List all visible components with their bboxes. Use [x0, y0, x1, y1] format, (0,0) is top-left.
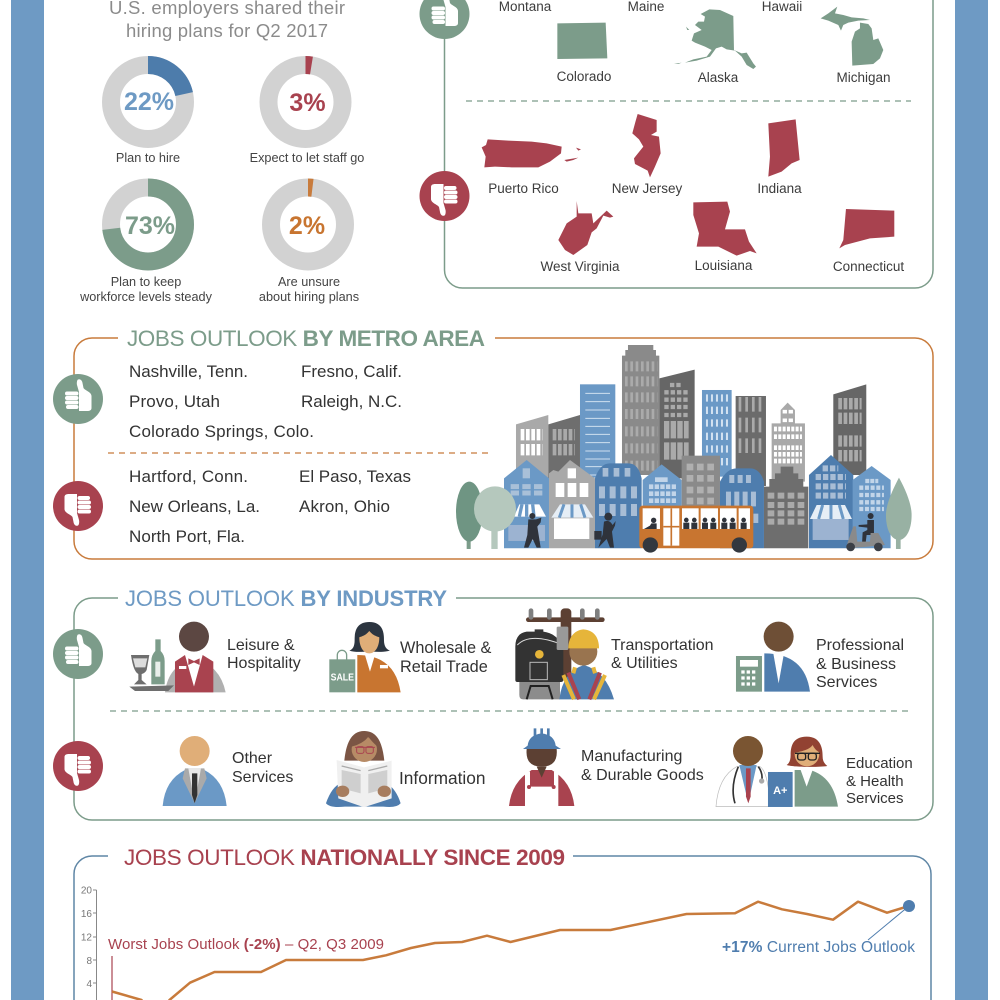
label: wholesale: Wholesale & — [400, 639, 492, 657]
icon: retail worker — [329, 622, 401, 692]
side band: left — [11, 0, 44, 1000]
icon: thumbs up industry — [53, 629, 103, 679]
state labels: negative: New Jersey — [612, 181, 683, 196]
icon: person reading newspaper — [326, 731, 401, 807]
state labels: negative: Puerto Rico — [488, 181, 559, 196]
icon: thumbs down states — [420, 171, 470, 221]
icon: other services person — [163, 736, 227, 806]
panel: jobs outlook by metro area — [53, 326, 933, 559]
panel border: metro — [74, 338, 933, 559]
chart line — [112, 902, 909, 1000]
label: information: Information — [399, 768, 485, 788]
metro list: positive: Raleigh, N.C. — [301, 392, 402, 411]
label: education: Services — [846, 790, 904, 807]
donut: 73% steady: Plan to keep — [111, 275, 181, 289]
donut: 3% let staff go — [250, 65, 364, 165]
chart axis: 4 — [86, 979, 92, 990]
donut: 3% let staff go: Expect to let staff go — [250, 151, 364, 165]
donut: 2% unsure: 2% — [289, 212, 325, 240]
chart axis: 12 — [81, 932, 92, 944]
panel border: industry — [74, 598, 933, 820]
icon: thumbs up metro — [53, 374, 103, 424]
donut: 73% steady: workforce levels steady — [79, 290, 213, 304]
icon: train and utility worker — [515, 608, 614, 699]
panel: jobs outlook by state — [420, 0, 933, 288]
label: professional: Services — [816, 674, 877, 691]
donut: 22% plan to hire: 22% — [124, 88, 174, 116]
icon: doctor and teacher: A+ — [773, 785, 787, 797]
icon: thumbs down metro — [53, 481, 103, 531]
divider: industry — [110, 710, 908, 712]
donut: 2% unsure: about hiring plans — [259, 290, 359, 304]
panel: employers hiring plans — [79, 0, 364, 304]
label: education: Education — [846, 755, 913, 772]
heading: national: JOBS OUTLOOK NATIONALLY SINCE 2009 — [124, 845, 565, 870]
donut: 2% unsure: Are unsure — [278, 275, 340, 289]
state shapes: negative — [482, 114, 894, 256]
chart axis: 8 — [86, 956, 92, 967]
heading: metro: JOBS OUTLOOK BY METRO AREA — [127, 326, 485, 351]
label: leisure: Leisure & — [227, 637, 295, 654]
state labels: negative: West Virginia — [540, 259, 620, 274]
donut: 3% let staff go: 3% — [289, 89, 326, 117]
label: wholesale: Retail Trade — [400, 658, 488, 676]
state labels: positive: Alaska — [698, 70, 739, 85]
metro list: negative: North Port, Fla. — [129, 527, 245, 546]
label: manufacturing: & Durable Goods — [581, 767, 704, 784]
metro list: negative: New Orleans, La. — [129, 497, 260, 516]
panel border: national — [74, 856, 931, 1000]
label: education: & Health — [846, 773, 904, 790]
state labels: negative: Connecticut — [833, 259, 904, 274]
annotation: current outlook — [722, 900, 915, 956]
label: professional: Professional — [816, 637, 904, 654]
state labels: negative: Indiana — [757, 181, 802, 196]
side band: right — [955, 0, 988, 1000]
donut: 22% plan to hire — [111, 65, 185, 165]
icon: thumbs down industry — [53, 741, 103, 791]
icon: waiter — [129, 622, 226, 692]
state labels: negative — [488, 181, 904, 274]
heading: hiring plans: hiring plans for Q2 2017 — [126, 20, 328, 41]
panel: jobs outlook nationally — [74, 845, 931, 1000]
icon: doctor and teacher — [716, 736, 838, 807]
state labels: positive: Colorado — [557, 69, 611, 84]
icon: business person — [736, 622, 810, 692]
state labels: positive — [499, 0, 891, 85]
label: other services: Other — [232, 750, 273, 767]
heading: hiring plans — [109, 0, 345, 41]
label: other services: Services — [232, 769, 293, 786]
donut: 73% steady — [79, 188, 213, 304]
metro list: positive: Provo, Utah — [129, 392, 220, 411]
label: manufacturing: Manufacturing — [581, 748, 682, 765]
metro list: positive: Nashville, Tenn. — [129, 362, 248, 381]
donut: 73% steady: 73% — [125, 212, 175, 240]
panel border: states — [444, 0, 933, 288]
state labels: positive: Michigan — [836, 70, 891, 85]
metro list: negative — [129, 467, 411, 546]
label: leisure: Hospitality — [227, 655, 301, 672]
state shapes: positive — [557, 7, 883, 69]
label: professional: & Business — [816, 656, 896, 673]
metro list: negative: Akron, Ohio — [299, 497, 390, 516]
metro list: negative: El Paso, Texas — [299, 467, 411, 486]
illustration: city skyline — [456, 345, 912, 553]
chart axis: 16 — [81, 909, 92, 920]
metro list: positive — [129, 362, 402, 441]
donut: 2% unsure — [259, 188, 359, 304]
line chart — [81, 886, 915, 1000]
donut: 22% plan to hire: Plan to hire — [116, 151, 180, 165]
metro list: positive: Fresno, Calif. — [301, 362, 402, 381]
state labels: negative: Louisiana — [695, 258, 753, 273]
annotation: worst outlook: Worst Jobs Outlook (-2%) – Q2, Q3 2009 — [108, 936, 384, 953]
panel: jobs outlook by industry — [53, 586, 933, 820]
label: transportation: Transportation — [611, 637, 714, 654]
annotation: current outlook: +17% Current Jobs Outlook — [722, 939, 915, 956]
metro list: positive: Colorado Springs, Colo. — [129, 422, 314, 441]
divider: states — [466, 100, 911, 102]
label: transportation: & Utilities — [611, 655, 678, 672]
icon: thumbs up states — [420, 0, 470, 39]
icon: retail worker: SALE — [331, 673, 354, 684]
divider: metro — [108, 452, 491, 454]
chart axis — [81, 886, 96, 1000]
heading: industry: JOBS OUTLOOK BY INDUSTRY — [125, 586, 447, 611]
icon: manufacturing worker — [509, 728, 574, 806]
chart axis: 20 — [81, 886, 92, 896]
metro list: negative: Hartford, Conn. — [129, 467, 248, 486]
